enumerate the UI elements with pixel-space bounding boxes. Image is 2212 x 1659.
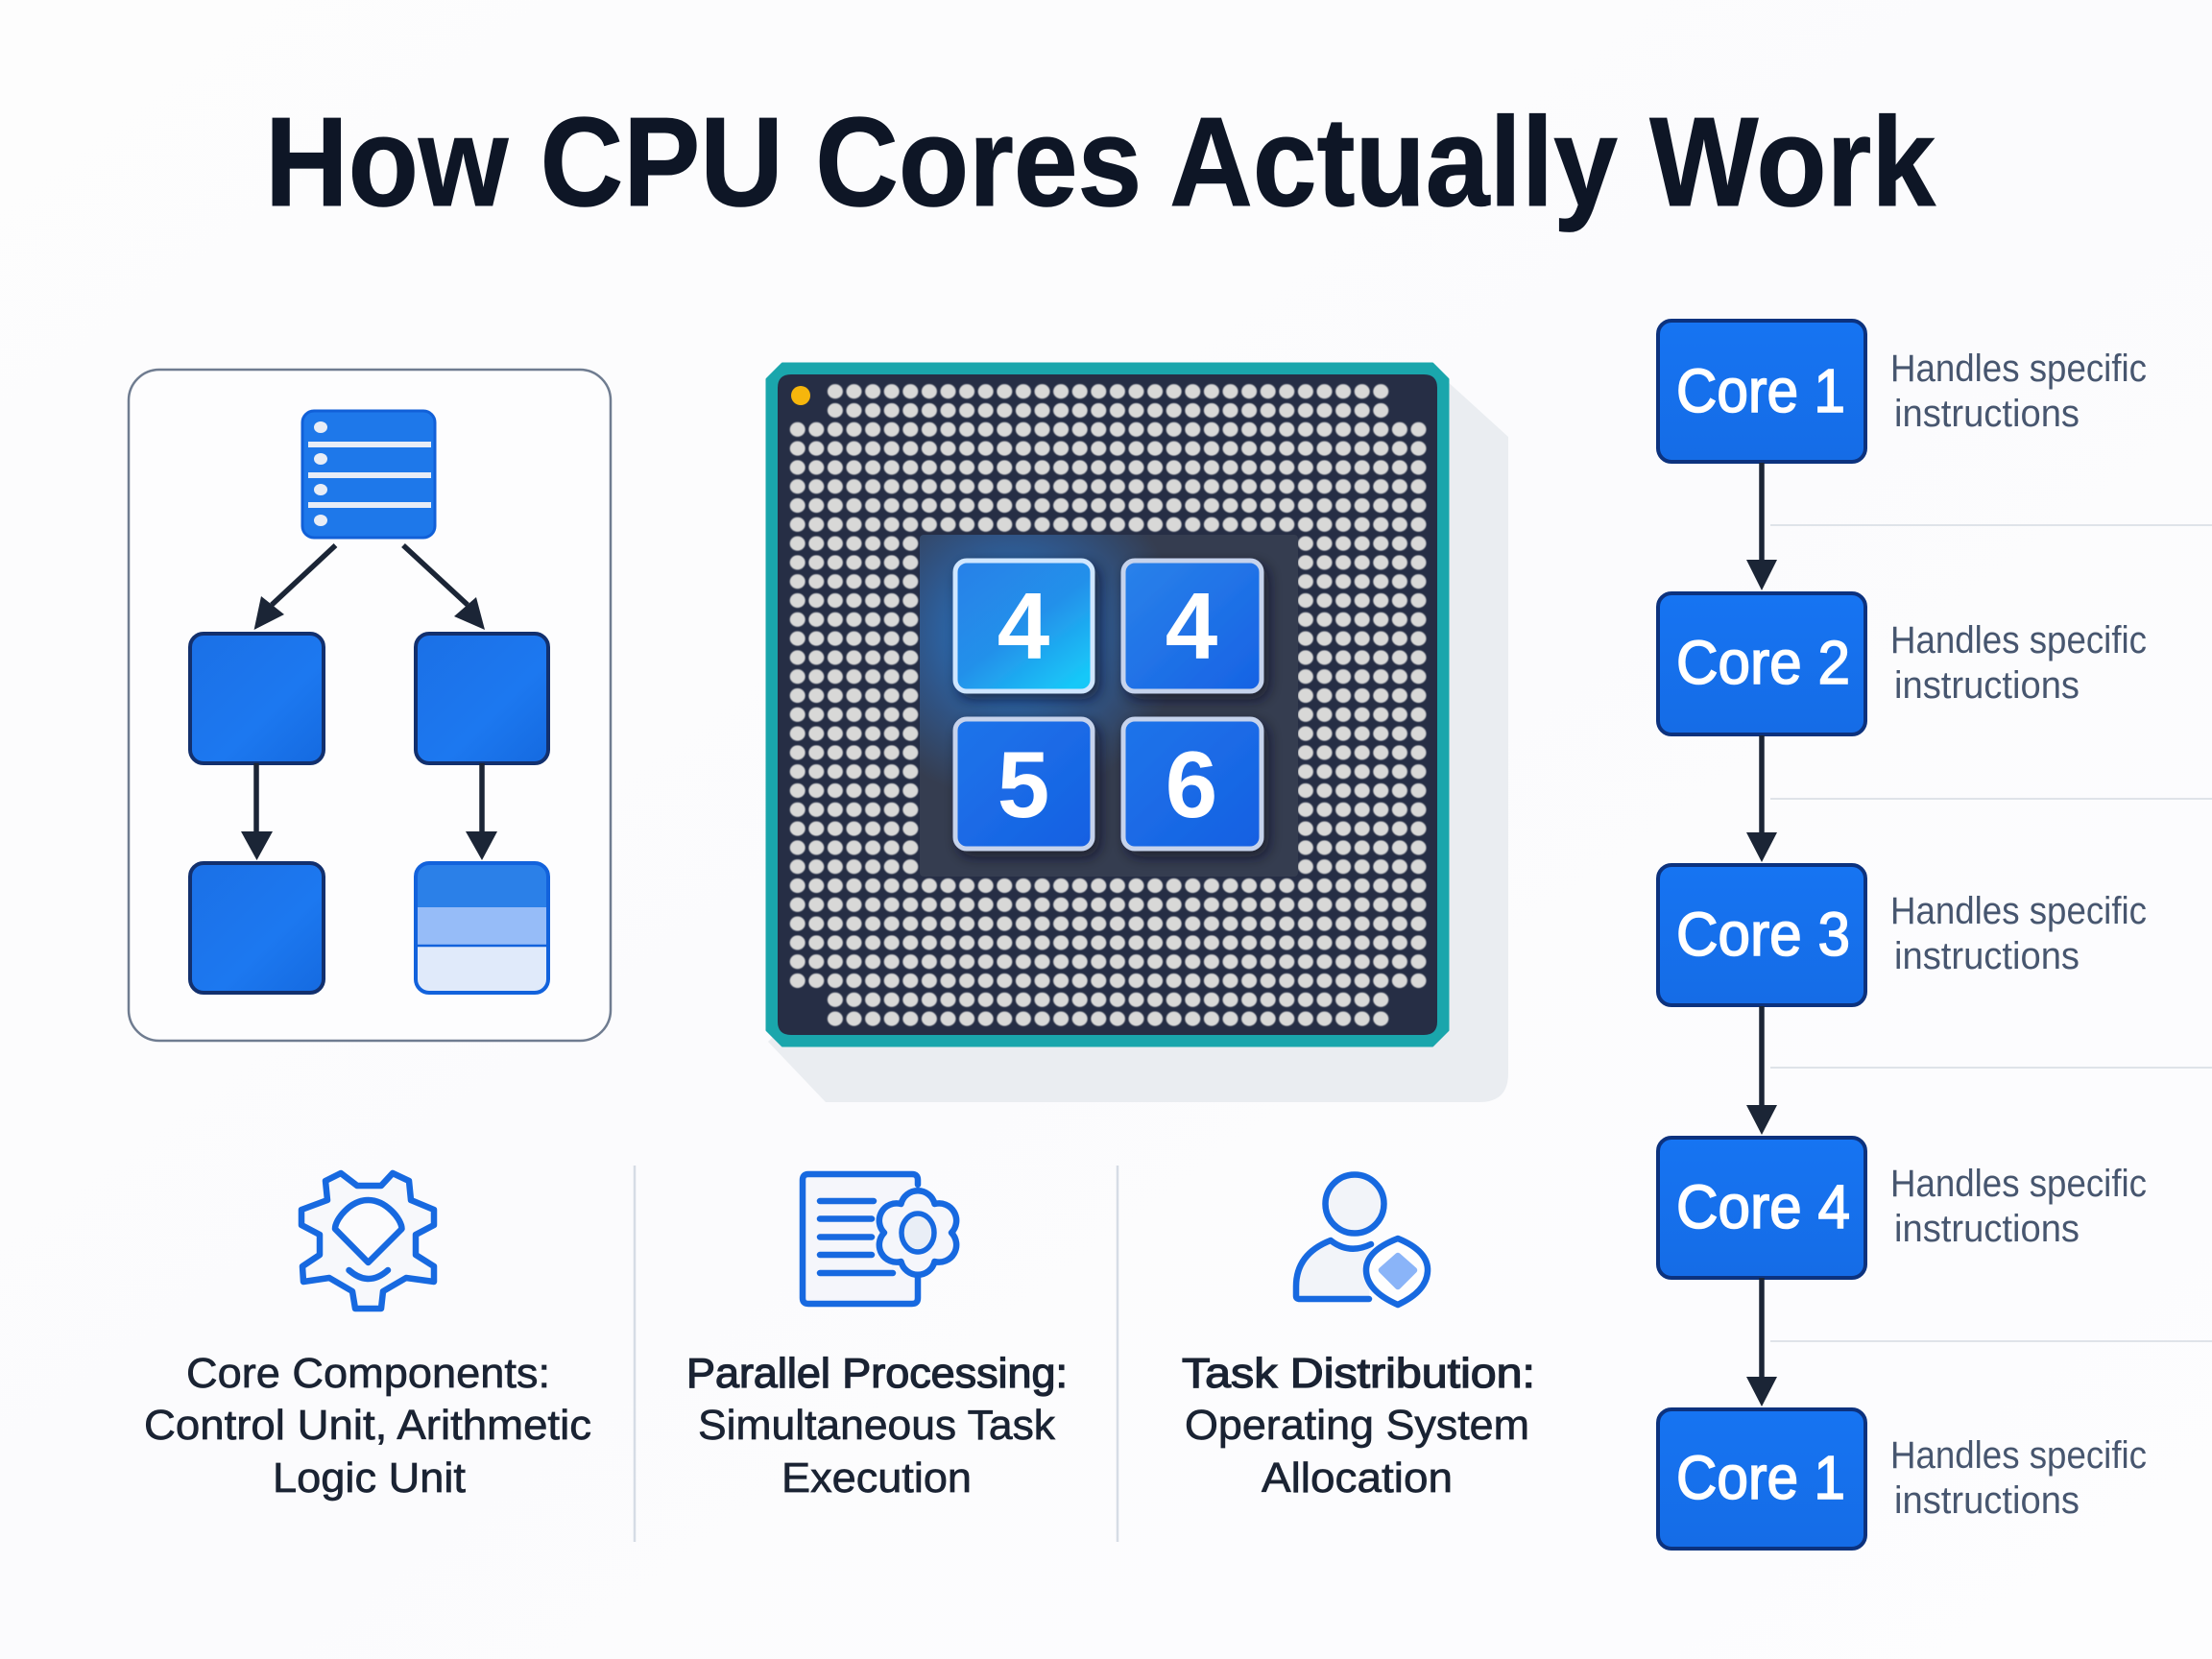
- final core 1 description: Handles specific: [1890, 1434, 2147, 1477]
- caption: parallel processing: Execution: [781, 1455, 972, 1502]
- core tile 3: [955, 719, 1093, 849]
- block: bottom right striped: [416, 863, 548, 993]
- title: How CPU Cores Actually Work: [265, 91, 1936, 232]
- caption: core components: Control Unit, Arithmetic: [144, 1402, 591, 1449]
- icon: gear with shield: [301, 1173, 434, 1309]
- core tile 2: 4: [1166, 573, 1217, 679]
- core 1 description: Handles specific: [1890, 348, 2147, 390]
- core 2 description: instructions: [1894, 664, 2080, 707]
- core 4 description: instructions: [1894, 1208, 2080, 1250]
- arrow: core 2 to core 3: [1746, 735, 1777, 862]
- caption: parallel processing: Parallel Processing:: [686, 1350, 1068, 1397]
- arrow: middle left to bottom left: [241, 763, 273, 860]
- die area: [920, 535, 1298, 877]
- arrow: core 1 to core 2: [1746, 463, 1777, 590]
- final core 1 box: [1658, 1409, 1865, 1549]
- chip teal frame: [767, 364, 1448, 1046]
- core 1 description: instructions: [1894, 393, 2080, 435]
- caption: parallel processing: [686, 1350, 1068, 1502]
- core tile 1: [955, 561, 1093, 691]
- core tile 4: 6: [1166, 732, 1217, 837]
- separator line: [1770, 1067, 2212, 1069]
- panel: cpu chip: [767, 364, 1508, 1102]
- arrow: core 4 to core 1: [1746, 1278, 1777, 1407]
- core 3 description: instructions: [1894, 935, 2080, 977]
- final core 1 box: Core 1: [1676, 1443, 1845, 1512]
- block: middle left: [190, 634, 324, 763]
- icon: person with shield: [1296, 1175, 1428, 1305]
- core 3 box: [1658, 865, 1865, 1005]
- caption: task distribution: Task Distribution:: [1182, 1350, 1535, 1397]
- icon: document with gear: [803, 1174, 956, 1304]
- separator line: [1770, 1340, 2212, 1342]
- panel frame: [129, 370, 611, 1041]
- core 3 description: [1890, 890, 2147, 977]
- caption: core components: [144, 1350, 591, 1502]
- panel: core components flow diagram: [129, 370, 611, 1041]
- caption: task distribution: Allocation: [1262, 1455, 1453, 1502]
- pin grid: [788, 382, 1428, 1028]
- divider left: [634, 1166, 636, 1542]
- core 2 description: [1890, 619, 2147, 707]
- core 1 box: [1658, 321, 1865, 462]
- core 4 description: Handles specific: [1890, 1163, 2147, 1205]
- orientation dot: [791, 386, 810, 405]
- core 3 description: Handles specific: [1890, 890, 2147, 932]
- separator line: [1770, 798, 2212, 800]
- core 3 box: Core 3: [1676, 900, 1850, 969]
- caption: core components: Core Components:: [186, 1350, 550, 1397]
- caption: parallel processing: Simultaneous Task: [698, 1402, 1056, 1449]
- chip drop shadow: [768, 379, 1508, 1102]
- core 1 description: [1890, 348, 2147, 435]
- caption: task distribution: [1182, 1350, 1535, 1502]
- block: middle right: [416, 634, 548, 763]
- core 4 box: Core 4: [1676, 1172, 1850, 1241]
- panel: core sequence column: [1658, 321, 2212, 1549]
- core 2 box: [1658, 593, 1865, 734]
- arrow: top to right block: [403, 545, 485, 630]
- chip substrate: [778, 374, 1437, 1035]
- core tile 3: 5: [998, 732, 1049, 837]
- core 1 box: Core 1: [1676, 356, 1845, 425]
- final core 1 description: instructions: [1894, 1479, 2080, 1522]
- block: bottom left: [190, 863, 324, 993]
- caption: task distribution: Operating System: [1185, 1402, 1529, 1449]
- top control block: [302, 411, 435, 538]
- arrow: middle right to bottom right: [466, 763, 497, 860]
- core tile 4: [1123, 719, 1262, 849]
- final core 1 description: [1890, 1434, 2147, 1522]
- core tile 2: [1123, 561, 1262, 691]
- core 4 description: [1890, 1163, 2147, 1250]
- core 4 box: [1658, 1138, 1865, 1278]
- separator line: [1770, 524, 2212, 526]
- core 2 description: Handles specific: [1890, 619, 2147, 661]
- arrow: core 3 to core 4: [1746, 1006, 1777, 1135]
- divider right: [1117, 1166, 1118, 1542]
- core tile 1: 4: [998, 573, 1049, 679]
- core 2 box: Core 2: [1676, 628, 1850, 697]
- arrow: top to left block: [254, 545, 336, 630]
- caption: core components: Logic Unit: [273, 1455, 466, 1502]
